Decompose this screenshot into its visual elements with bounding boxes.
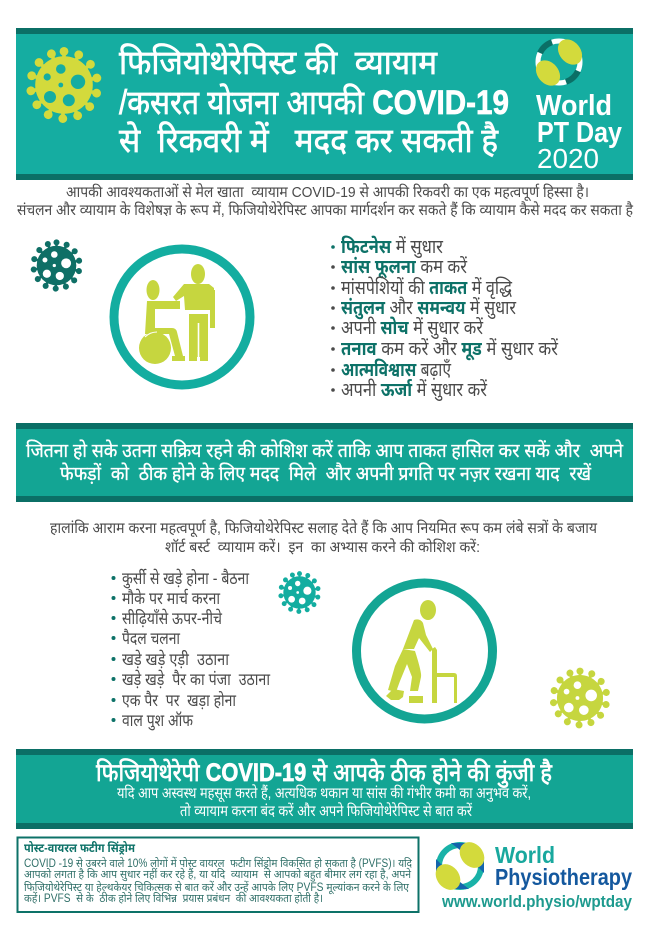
list: benefits: अपनी सोच में सुधार करें (341, 316, 484, 340)
panel: key to recovery banner: फिजियोथेरेपी COVID-19 से आपके ठीक होने की कुंजी है (96, 757, 553, 788)
icon: lime virus (549, 668, 610, 729)
panel: post-viral fatigue syndrome: पोस्ट-वायरल फटीग सिंड्रोम (24, 840, 135, 855)
title: /कसरत योजना आपकी COVID-19 (119, 83, 509, 122)
logo: World PT Day: World (536, 90, 612, 122)
list: exercises: खड़े खड़े एड़ी उठाना (122, 648, 230, 669)
icon: person walking with chair (356, 583, 492, 719)
intro paragraph: आपकी आवश्यकताओं से मेल खाता व्यायाम COVID-19 से आपकी रिकवरी का एक महत्वपूर्ण हिस्सा है। (66, 183, 589, 202)
list: exercises (112, 567, 270, 732)
list: benefits: संतुलन और समन्वय में सुधार (341, 296, 517, 320)
panel: stay active banner: फेफड़ों को ठीक होने के लिए मदद मिले और अपनी प्रगति पर नज़र रखना याद रखें (60, 462, 591, 485)
list: benefits: सांस फूलना कम करें (341, 255, 468, 279)
panel: post-viral fatigue syndrome: COVID -19 से उबरने वाले 10% लोगों में पोस्ट वायरल फटीग सिंड्रोम विकसित हो सकता है (PVFS)। यदि (24, 856, 413, 870)
list: exercises: खड़े खड़े पैर का पंजा उठाना (122, 668, 270, 689)
panel: stay active banner (16, 423, 633, 502)
panel: post-viral fatigue syndrome: कहें। PVFS से के ठीक होने लिए विभिन्न प्रयास प्रबंधन की आवश्यकता होती है। (24, 891, 323, 905)
logo: World PT Day: PT Day (537, 117, 622, 149)
list: benefits: अपनी ऊर्जा में सुधार करें (341, 378, 488, 402)
logo: World PT Day: 2020 (537, 143, 599, 174)
icon: dark green virus (30, 239, 83, 292)
panel: post-viral fatigue syndrome (18, 838, 418, 912)
rest advice paragraph (50, 519, 597, 556)
list: exercises: पैदल चलना (122, 627, 180, 648)
panel: key to recovery banner: तो व्यायाम करना बंद करें और अपने फिजियोथेरेपिस्ट से बात करें (180, 802, 473, 820)
panel: key to recovery banner: यदि आप अस्वस्थ महसूस करते हैं, अत्यधिक थकान या सांस की गंभीर कमी का अनुभव करें, (117, 784, 531, 803)
panel: header banner (16, 28, 633, 180)
list: benefits: तनाव कम करें और मूड में सुधार करें (341, 337, 559, 361)
title (119, 43, 509, 160)
title: फिजियोथेरेपिस्ट की व्यायाम (119, 43, 438, 82)
panel: post-viral fatigue syndrome: फिजियोथेरेपिस्ट या हेल्थकेयर चिकित्सक से बात करें और उन्हें आपके लिए PVFS मूल्यांकन करने के लिए (24, 880, 410, 895)
list: benefits (331, 235, 559, 402)
rest advice paragraph: हालांकि आराम करना महत्वपूर्ण है, फिजियोथेरेपिस्ट सलाह देते हैं कि आप नियमित रूप कम लंबे सत्रों के बजाय (50, 519, 597, 538)
rest advice paragraph: शॉर्ट बर्स्ट व्यायाम करें। इन का अभ्यास करने की कोशिश करें: (165, 538, 480, 556)
list: exercises: एक पैर पर खड़ा होना (122, 689, 236, 710)
title: से रिकवरी में मदद कर सकती है (119, 121, 499, 160)
logo: World Physiotherapy (431, 837, 632, 911)
intro paragraph (17, 183, 634, 219)
list: exercises: मौके पर मार्च करना (122, 587, 220, 608)
list: exercises: सीढ़ियाँसे ऊपर-नीचे (122, 607, 223, 628)
list: benefits: आत्मविश्वास बढ़ाएँ (341, 358, 451, 381)
list: benefits: मांसपेशियों की ताकत में वृद्धि (341, 276, 513, 300)
list: benefits: फिटनेस में सुधार (341, 235, 444, 259)
panel: key to recovery banner (16, 749, 633, 829)
icon: header virus (26, 47, 102, 123)
logo: World Physiotherapy: World (495, 842, 555, 868)
icon: physiotherapist with wheelchair patient (114, 249, 250, 385)
list: exercises: कुर्सी से खड़े होना - बैठना (122, 567, 249, 590)
icon: teal virus (278, 571, 321, 614)
panel: post-viral fatigue syndrome: आपको लगता है कि आप सुधार नहीं कर रहे हैं, या यदि व्यायाम से आपको बहुत बीमार लग रहा है, अपने (24, 867, 412, 882)
list: exercises: वाल पुश ऑफ (122, 710, 194, 732)
logo: World PT Day (531, 35, 622, 174)
